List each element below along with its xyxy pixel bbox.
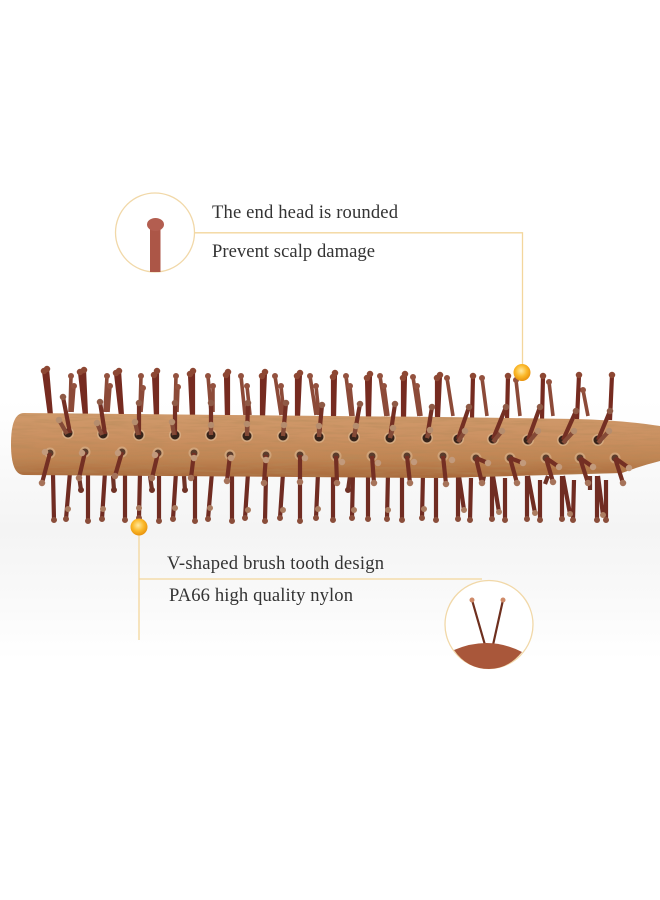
leader line: bottom: [139, 535, 482, 640]
middle bristle holes: [50, 452, 615, 458]
back row long bristles: [44, 369, 612, 420]
bottom row bristles: [53, 472, 606, 521]
wooden barrel: [11, 413, 660, 478]
callout: v-shaped tooth: [139, 535, 533, 669]
marker dot: bottom: [130, 518, 148, 536]
text: pa66 high quality nylon: PA66 high quality nylon: [169, 585, 354, 606]
icon: v-shaped bristles: [445, 580, 533, 669]
icon: rounded bristle tip: [116, 193, 194, 272]
text: the end head is rounded: The end head is rounded: [212, 202, 399, 223]
callout: rounded end head: [116, 193, 522, 364]
back row short bristles: [70, 376, 588, 416]
marker dot: top: [514, 364, 530, 381]
text: prevent scalp damage: Prevent scalp damage: [212, 241, 375, 262]
lower back bristles: [79, 476, 590, 490]
wood grain: [11, 413, 660, 478]
upper bristle holes: [68, 433, 598, 440]
leader line: top: [194, 233, 522, 364]
middle front bristles: [42, 452, 629, 484]
upper front bristles: [59, 397, 610, 443]
hair brush: [11, 369, 660, 521]
text: v-shaped brush tooth design: V-shaped brush tooth design: [167, 553, 385, 574]
